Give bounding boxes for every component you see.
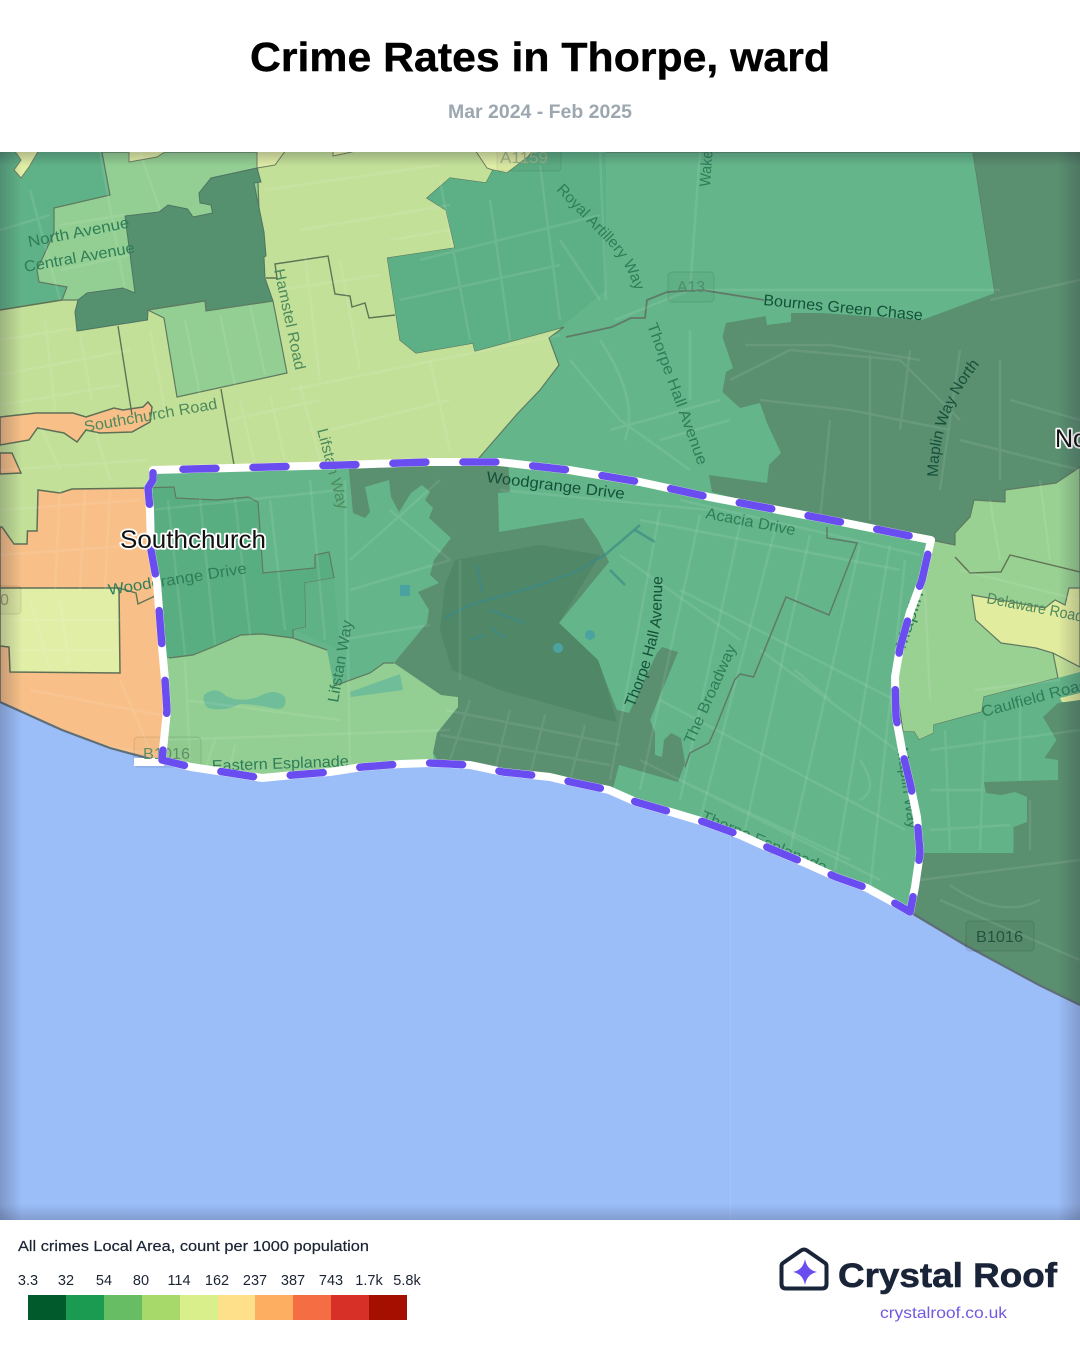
- area: south-east dark: [905, 700, 1080, 1010]
- street labels: Maplin Way North: [927, 360, 979, 476]
- ward outline: white casing: [148, 462, 931, 912]
- boundary line: Bournes Green Chase: [566, 290, 764, 337]
- legend tick labels: [18, 1273, 421, 1289]
- legend tick labels: 32: [58, 1273, 74, 1289]
- place label: Southchurch: Southchurch: [120, 526, 266, 554]
- minor streets: surrounding area: [0, 152, 1080, 960]
- street labels: Acacia Drive: [704, 505, 797, 539]
- street labels: Maplin Way: [893, 746, 921, 830]
- area: small yellow by Caulfield Road: [1060, 693, 1080, 702]
- road shield: B1016 west: B1016: [143, 746, 190, 763]
- legend tick labels: 1.7k: [355, 1273, 383, 1289]
- sea tile seam: [730, 835, 731, 1220]
- road shield: west: 0: [0, 592, 9, 609]
- area: top pale green: [37, 152, 262, 300]
- street labels: Thorpe Hall Avenue: [643, 321, 711, 467]
- ward: central darker woodland: [440, 545, 617, 722]
- area: east pale green: [895, 467, 1080, 740]
- legend tick labels: 54: [96, 1273, 112, 1289]
- street labels: Royal Artillery Way: [557, 184, 643, 288]
- area: top-left pale yellow pockets: [14, 150, 533, 178]
- area: west pale yellow block: [0, 588, 120, 673]
- ward: central dark area: [348, 460, 685, 800]
- road shield: B1016 west: [134, 737, 201, 767]
- sea: [0, 702, 1080, 1220]
- street labels: Central Avenue: [23, 240, 136, 276]
- street labels: Thorpe Hall Avenue: [624, 576, 662, 704]
- street labels: Woodgrange Drive: [107, 560, 248, 599]
- road shield: west: [0, 586, 21, 614]
- boundary lines: [0, 256, 1080, 604]
- legend tick labels: 5.8k: [393, 1273, 421, 1289]
- subtitle: date range: Mar 2024 - Feb 2025: [448, 102, 632, 123]
- area: north-west dark: [75, 168, 273, 331]
- street labels: Thorpe Esplanade: [698, 808, 829, 876]
- road shield: B1016 east: B1016: [976, 929, 1023, 946]
- legend tick labels: 162: [205, 1273, 229, 1289]
- area: Delaware Road pale yellow: [972, 588, 1080, 667]
- ward: mid-west area: [293, 578, 334, 630]
- logo url: crystalroof.co.uk: [880, 1305, 1008, 1322]
- road shield: B1016 east: [966, 921, 1034, 951]
- legend tick labels: 237: [243, 1273, 267, 1289]
- street labels: Caulfield Road: [980, 676, 1080, 721]
- legend tick labels: 114: [167, 1273, 191, 1289]
- street labels: Woodgrange Drive: [486, 469, 626, 503]
- area: top-left mid green: [0, 152, 110, 310]
- choropleth map: [0, 152, 1080, 1220]
- icon: house with star: [782, 1250, 826, 1288]
- street labels: [24, 152, 1080, 915]
- legend tick labels: 387: [281, 1273, 305, 1289]
- ward outline: purple dashes: [148, 462, 931, 912]
- map edge shading: [0, 152, 1080, 1220]
- legend tick labels: 3.3: [18, 1273, 38, 1289]
- street labels: Lifstan Way: [325, 619, 356, 704]
- area: west orange: [0, 488, 170, 770]
- logo wordmark: Crystal Roof: [838, 1257, 1058, 1295]
- map base: light green areas: [0, 152, 1080, 733]
- street labels: Wake: [697, 150, 717, 187]
- east output-area boundary: [685, 527, 857, 767]
- legend tick labels: 80: [133, 1273, 149, 1289]
- ward streets: [150, 480, 920, 890]
- park ponds: [204, 674, 403, 709]
- street labels: Hamstel Road: [270, 267, 308, 372]
- area: Southchurch Road orange strip: [0, 402, 152, 445]
- road shield: A1159: [497, 150, 561, 171]
- legend: [18, 1238, 421, 1320]
- street labels: Maplin: [893, 589, 927, 651]
- area: small orange corner: [0, 453, 21, 474]
- legend colour scale: [28, 1295, 407, 1320]
- area: north-centre and east mid green: [386, 152, 995, 498]
- road shield: A13: [668, 272, 714, 302]
- road shield: A1159: A1159: [500, 150, 548, 167]
- street labels: Lifstan Way: [313, 427, 351, 511]
- area: east mid green: [903, 672, 1080, 870]
- legend tick labels: 743: [319, 1273, 343, 1289]
- street labels: North Avenue: [27, 215, 131, 251]
- street labels: Southchurch Road: [83, 396, 219, 436]
- legend title: All crimes Local Area, count per 1000 population: [18, 1238, 369, 1255]
- ward: southern pale park area: [166, 634, 458, 774]
- small ponds: [400, 585, 595, 653]
- street labels: Bournes Green Chase: [763, 292, 924, 324]
- ward base: [154, 468, 918, 906]
- logo: Crystal Roof: [782, 1250, 1058, 1322]
- coastline strokes: [0, 702, 1080, 1005]
- title: Crime Rates in Thorpe, ward: [250, 34, 830, 80]
- area: north-east dark: [709, 152, 1080, 545]
- water lines: [445, 525, 655, 640]
- street labels: Eastern Esplanade: [212, 753, 349, 775]
- ward: western darker output area: [140, 487, 334, 660]
- ward interior: [152, 466, 920, 906]
- street labels: The Broadway: [681, 642, 740, 747]
- area: north-centre darker tone: [388, 152, 606, 353]
- area: pale square: [148, 301, 287, 397]
- road shield: A13: A13: [677, 279, 705, 296]
